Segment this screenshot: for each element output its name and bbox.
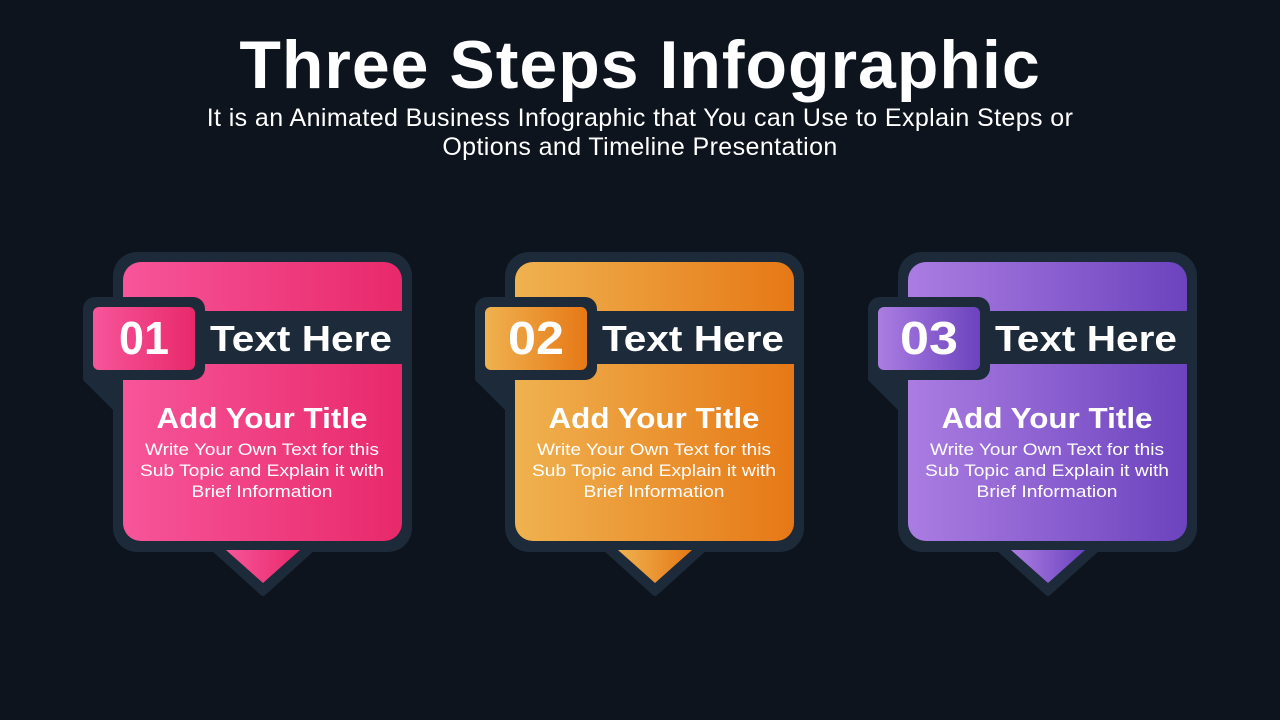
card 1: Write Your Own Text for this bbox=[145, 440, 379, 459]
title: Three Steps Infographic bbox=[239, 27, 1041, 103]
card 1: Add Your Title bbox=[156, 403, 368, 435]
card 1: Sub Topic and Explain it with bbox=[140, 461, 384, 480]
card 2: Add Your Title bbox=[548, 403, 760, 435]
card 1: Brief Information bbox=[192, 482, 332, 501]
card 1: Text Here bbox=[210, 318, 392, 359]
card 2: Brief Information bbox=[584, 482, 724, 501]
card 2 bbox=[475, 252, 804, 593]
card 3: Sub Topic and Explain it with bbox=[925, 461, 1169, 480]
subtitle bbox=[207, 104, 1073, 161]
card 2: 02 bbox=[508, 312, 564, 364]
card 2: Write Your Own Text for this bbox=[537, 440, 771, 459]
card 3: 03 bbox=[900, 312, 958, 364]
subtitle: Options and Timeline Presentation bbox=[442, 133, 838, 161]
card 3: Text Here bbox=[995, 318, 1177, 359]
card 3: Write Your Own Text for this bbox=[930, 440, 1164, 459]
card 2: Sub Topic and Explain it with bbox=[532, 461, 776, 480]
card 1: 01 bbox=[119, 312, 169, 364]
card 2: Text Here bbox=[602, 318, 784, 359]
card 1 bbox=[83, 252, 412, 593]
card 3: Add Your Title bbox=[942, 403, 1152, 435]
card 3: Brief Information bbox=[976, 482, 1118, 501]
subtitle: It is an Animated Business Infographic that You can Use to Explain Steps or bbox=[207, 104, 1073, 132]
card 3 bbox=[868, 252, 1197, 593]
